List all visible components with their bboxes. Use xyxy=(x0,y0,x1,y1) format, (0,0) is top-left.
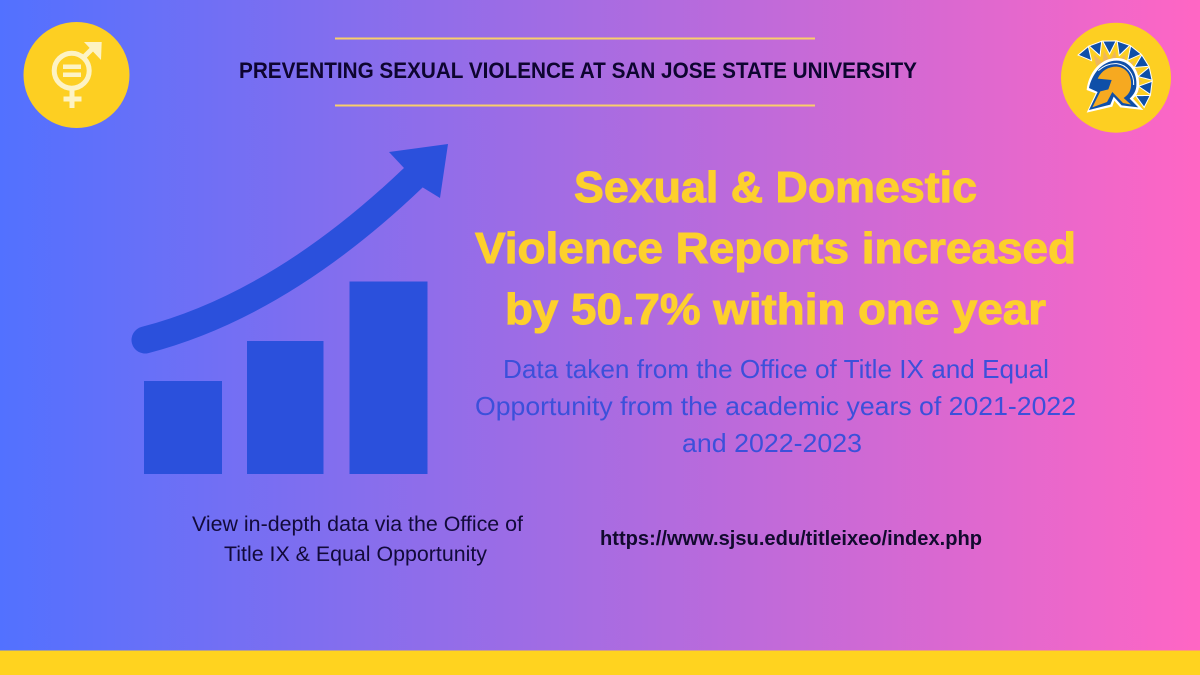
data source note: and 2022-2023 xyxy=(682,428,862,458)
bar 1 xyxy=(144,381,222,474)
headline: by 50.7% within one year xyxy=(505,285,1046,334)
headline xyxy=(475,163,1076,334)
crest: blue triangles xyxy=(1078,41,1152,107)
helmet outline xyxy=(1087,58,1143,113)
icon: gender equality badge xyxy=(24,22,130,128)
helmet body xyxy=(1092,67,1131,107)
helmet white band xyxy=(1098,64,1134,85)
title: PREVENTING SEXUAL VIOLENCE AT SAN JOSE STATE UNIVERSITY xyxy=(239,58,917,83)
data source note: Data taken from the Office of Title IX and Equal xyxy=(503,354,1049,384)
view data caption: Title IX & Equal Opportunity xyxy=(224,543,487,566)
view data caption xyxy=(192,513,523,566)
crest: tan spikes xyxy=(1090,50,1143,96)
bottom divider line xyxy=(335,104,815,106)
icon: SJSU spartan logo badge xyxy=(1061,23,1171,133)
data source note xyxy=(475,354,1076,458)
data source note: Opportunity from the academic years of 2021-2022 xyxy=(475,391,1076,421)
top divider line xyxy=(335,38,815,40)
arrow rising xyxy=(145,144,448,340)
bar 2 xyxy=(247,341,324,474)
bar 3 xyxy=(350,282,428,474)
chart: rising bars with arrow xyxy=(144,144,448,474)
view data caption: View in-depth data via the Office of xyxy=(192,513,523,536)
bottom yellow band xyxy=(0,650,1200,675)
headline: Sexual & Domestic xyxy=(574,163,977,212)
headline: Violence Reports increased xyxy=(475,224,1076,273)
link url: https://www.sjsu.edu/titleixeo/index.php xyxy=(600,528,982,550)
